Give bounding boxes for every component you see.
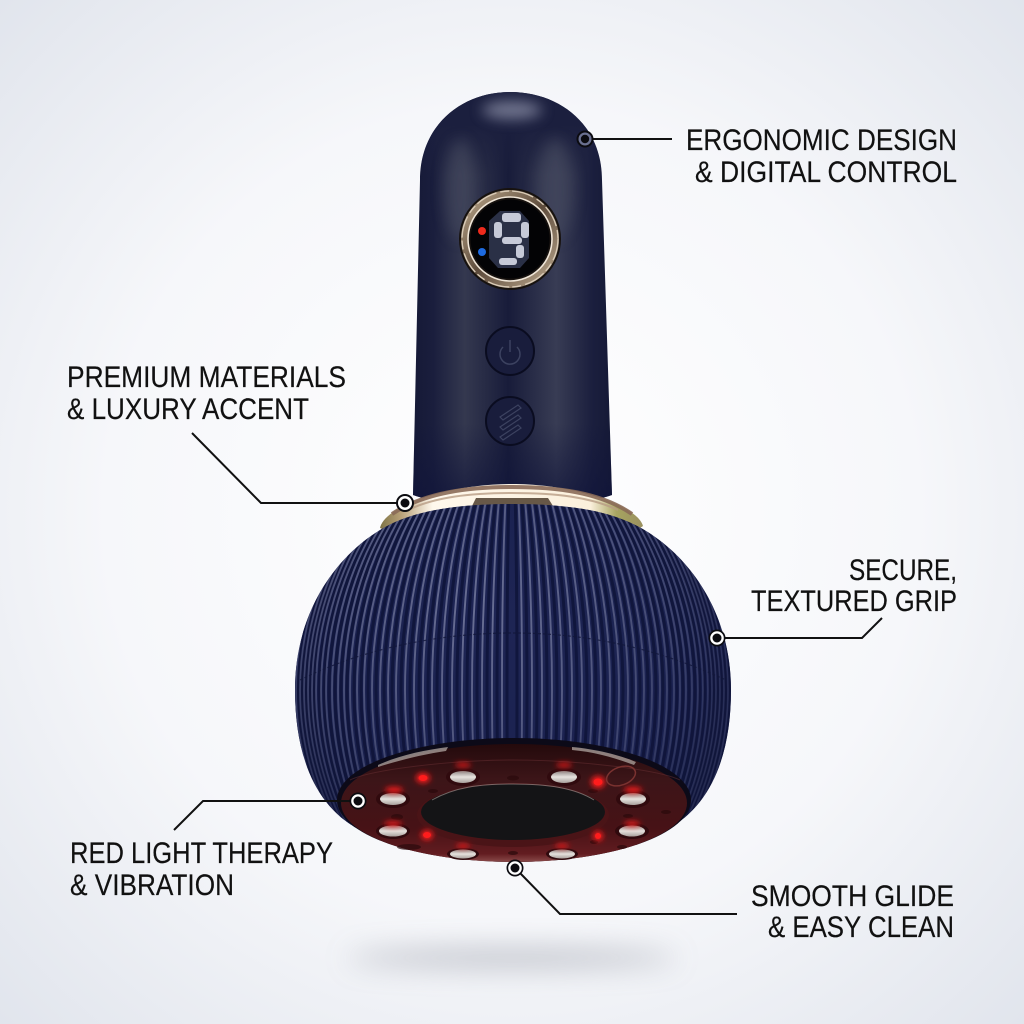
callout: red light therapy: RED LIGHT THERAPY	[70, 837, 333, 870]
power button	[486, 327, 534, 375]
callout: premium materials: & LUXURY ACCENT	[67, 393, 309, 426]
callout: red light therapy	[70, 792, 366, 902]
callout: premium materials: PREMIUM MATERIALS	[67, 361, 346, 394]
callout: red light therapy: & VIBRATION	[70, 869, 234, 902]
central plate	[417, 783, 609, 847]
digit 9	[494, 213, 529, 265]
small dots	[391, 776, 671, 855]
callout: smooth glide: SMOOTH GLIDE	[751, 880, 954, 913]
callout: textured grip: TEXTURED GRIP	[751, 585, 957, 618]
reflective ring	[604, 762, 638, 790]
callout: textured grip: SECURE,	[849, 554, 957, 587]
red LEDs	[384, 763, 642, 848]
digital display	[459, 188, 561, 290]
callout: ergonomic design	[576, 124, 957, 189]
floor shadow	[347, 949, 677, 967]
mode button	[486, 397, 534, 445]
metal nodes	[376, 768, 650, 860]
handle	[413, 92, 612, 506]
gold collar	[380, 484, 643, 535]
callout: smooth glide	[506, 860, 954, 944]
red light treatment head	[337, 738, 691, 862]
indicator dots	[478, 227, 486, 256]
callout: textured grip	[708, 554, 957, 646]
product: massager device	[294, 92, 731, 940]
callout: ergonomic design: & DIGITAL CONTROL	[695, 156, 957, 189]
callout: premium materials	[67, 361, 414, 512]
callout: smooth glide: & EASY CLEAN	[768, 911, 954, 944]
callout: ergonomic design: ERGONOMIC DESIGN	[686, 124, 957, 157]
ribbed sphere	[295, 504, 731, 829]
